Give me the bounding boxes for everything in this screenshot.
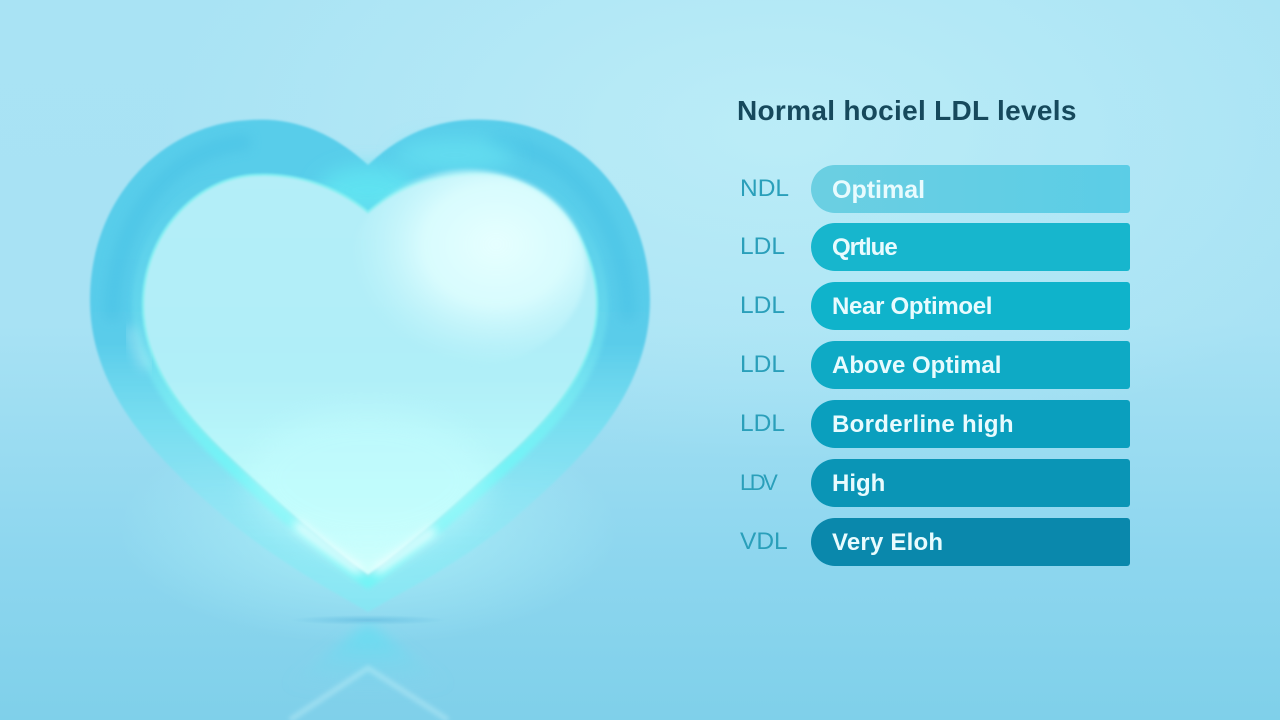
heart ring <box>90 120 650 612</box>
heart illustration <box>88 118 652 720</box>
floor shadow <box>290 615 446 625</box>
level row 3: Near Optimoel <box>832 293 992 320</box>
level row 5: LDL <box>740 410 785 437</box>
level row 7 <box>740 518 1130 566</box>
level row 5: Borderline high <box>832 411 1014 438</box>
level row 4: Above Optimal <box>832 352 1001 379</box>
heart reflection <box>288 624 449 720</box>
level row 6 <box>740 459 1130 507</box>
level row 2 <box>740 223 1130 271</box>
level row 1 <box>740 165 1130 213</box>
level row 7: VDL <box>740 528 788 555</box>
highlight: ring left edge <box>132 330 146 366</box>
level row 3 <box>740 282 1130 330</box>
level row 4: LDL <box>740 351 785 378</box>
level row 4 <box>740 341 1130 389</box>
level row 2: Qrtlue <box>832 234 897 261</box>
highlight: upper right lobe <box>350 170 586 366</box>
level row 1: Optimal <box>832 176 925 204</box>
highlight: bottom tip <box>248 410 488 570</box>
level row 2: LDL <box>740 233 785 260</box>
level row 1: NDL <box>740 175 789 202</box>
level row 7: Very Eloh <box>832 529 943 556</box>
level row 6: High <box>832 470 885 497</box>
level row 3: LDL <box>740 292 785 319</box>
level row 6: LDV <box>740 470 775 495</box>
title: Normal hociel LDL levels <box>737 95 1077 126</box>
level row 5 <box>740 400 1130 448</box>
